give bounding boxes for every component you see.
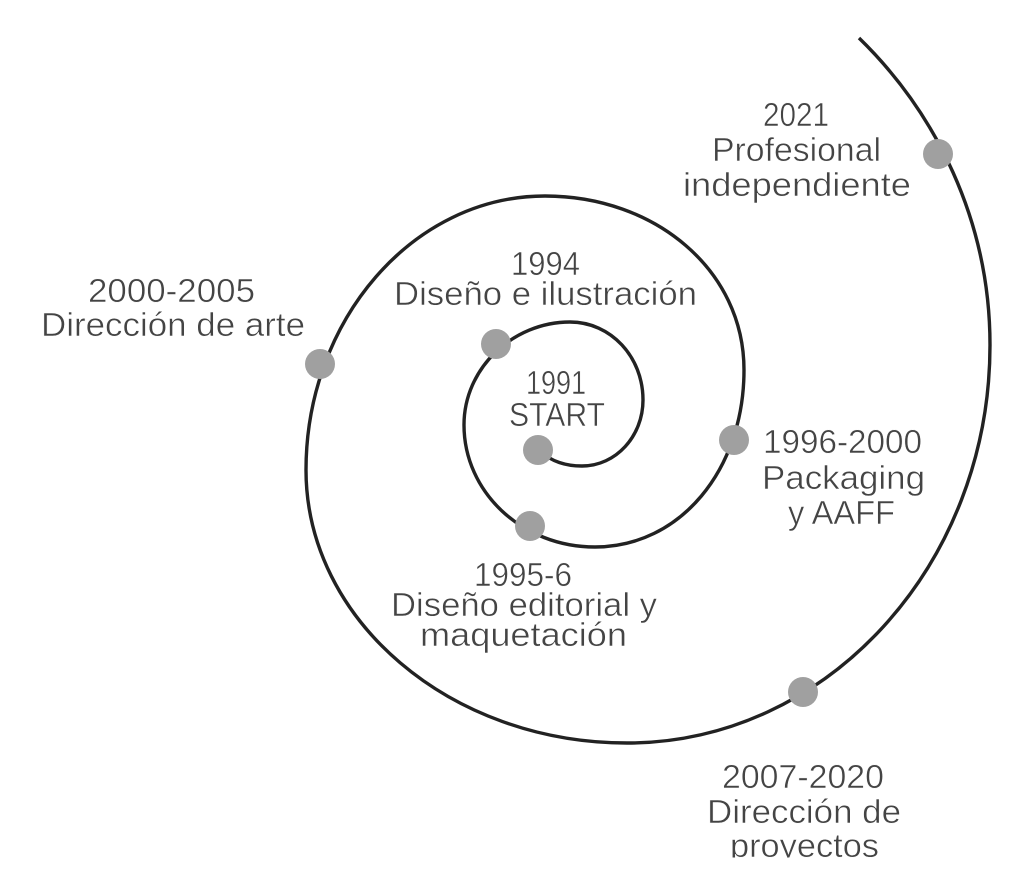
label: 1995-6 Diseño editorial y maquetación: [391, 556, 658, 653]
label: 1995-6 Diseño editorial y maquetación: maquetación: [420, 616, 627, 653]
label: 2021 Profesional independiente: 2021: [763, 96, 829, 133]
label: 2007-2020 Dirección de proyectos: 2007-2020: [722, 758, 884, 795]
milestone dot: 1991: [523, 435, 553, 465]
milestone dot: 1995-6: [515, 511, 545, 541]
label: 1994 Diseño e ilustración: [394, 245, 697, 312]
spiral line: [306, 38, 990, 743]
label: 1996-2000 Packaging y AAFF: Packaging: [762, 459, 925, 496]
label: 2000-2005 Dirección de arte: [41, 272, 305, 343]
label: 2007-2020 Dirección de proyectos: proyectos: [730, 827, 879, 864]
label: 2021 Profesional independiente: independiente: [683, 166, 911, 203]
label: 2000-2005 Dirección de arte: Dirección de arte: [41, 306, 305, 343]
milestone dot: 1996-2000: [719, 425, 749, 455]
label: 1996-2000 Packaging y AAFF: [762, 423, 925, 531]
milestone dot: 2007-2020: [788, 677, 818, 707]
milestone dot: 2000-2005: [305, 349, 335, 379]
label: 1995-6 Diseño editorial y maquetación: 1995-6: [474, 556, 572, 593]
label: 2021 Profesional independiente: Profesional: [712, 131, 881, 168]
label: 2000-2005 Dirección de arte: 2000-2005: [88, 272, 255, 309]
label: 1996-2000 Packaging y AAFF: 1996-2000: [763, 423, 922, 460]
label: 2007-2020 Dirección de proyectos: Dirección de: [707, 793, 901, 830]
label: 1994 Diseño e ilustración: Diseño e ilustración: [394, 275, 697, 312]
label: 2007-2020 Dirección de proyectos: [710, 764, 900, 858]
label: 1991 START: 1991: [526, 364, 586, 401]
milestone dot: 1994: [481, 329, 511, 359]
label: 1991 START: [509, 364, 605, 433]
label: 1994 Diseño e ilustración: 1994: [511, 245, 580, 282]
label: 1991 START: START: [509, 396, 605, 433]
label: 1996-2000 Packaging y AAFF: y AAFF: [788, 494, 895, 531]
label: 1995-6 Diseño editorial y maquetación: Diseño editorial y: [391, 586, 658, 623]
milestone dot: 2021: [923, 139, 953, 169]
label: 2021 Profesional independiente: [683, 96, 911, 203]
